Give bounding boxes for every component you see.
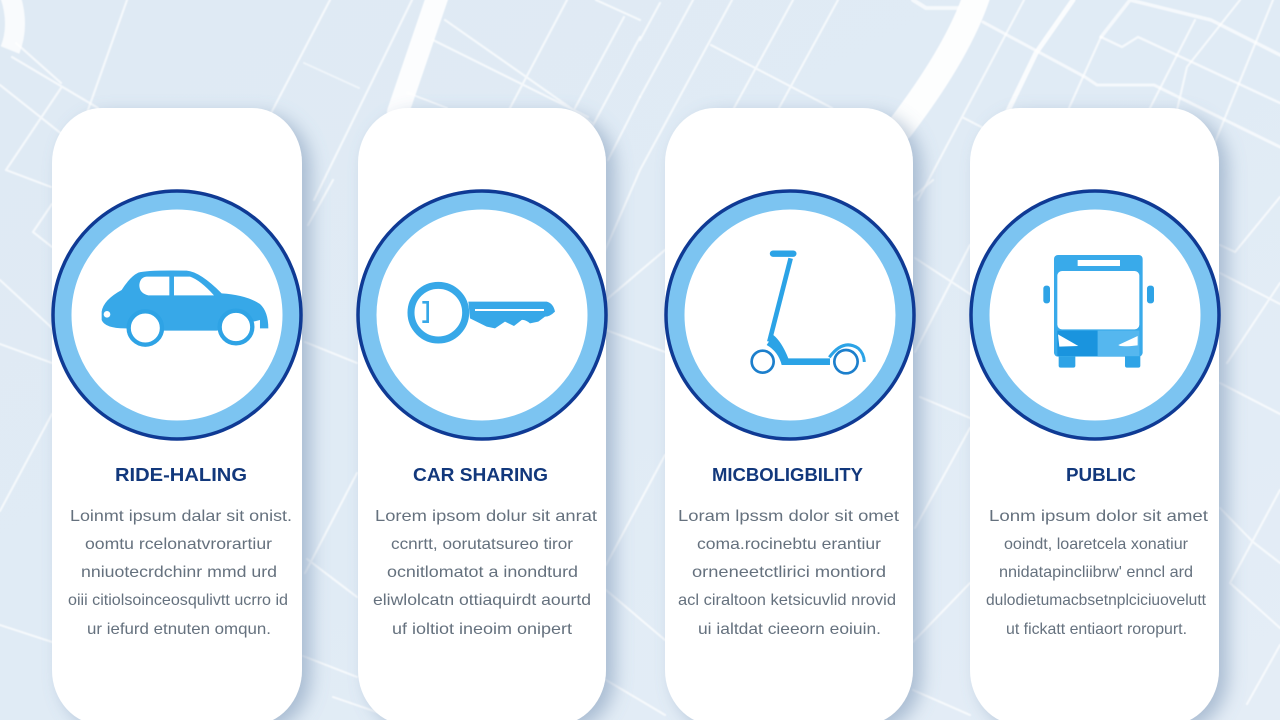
icon: bus bbox=[1043, 255, 1154, 368]
icon: scooter bbox=[752, 254, 864, 373]
card background bbox=[970, 108, 1219, 720]
body text: ut fickatt entiaort roropurt. bbox=[1006, 621, 1187, 638]
body text bbox=[68, 508, 292, 638]
body text bbox=[986, 508, 1209, 638]
heading: RIDE-HALING bbox=[115, 464, 247, 485]
body text: dulodietumacbsetnplciciuovelutt bbox=[986, 592, 1207, 609]
body text: ccnrtt, oorutatsureo tiror bbox=[391, 536, 574, 553]
body text: ocnitlomatot a inondturd bbox=[387, 564, 578, 581]
body text bbox=[678, 508, 900, 638]
body text: Lonm ipsum dolor sit amet bbox=[989, 508, 1209, 525]
heading: PUBLIC bbox=[1066, 464, 1136, 485]
body text: coma.rocinebtu erantiur bbox=[697, 536, 882, 553]
body text: ooindt, loaretcela xonatiur bbox=[1004, 536, 1189, 553]
card background bbox=[665, 108, 913, 720]
body text: orneneetctlirici montiord bbox=[692, 564, 886, 581]
heading: CAR SHARING bbox=[413, 464, 548, 485]
body text: nnidatapincliibrw' enncl ard bbox=[999, 564, 1193, 581]
body text: nniuotecrdchinr mmd urd bbox=[81, 564, 277, 581]
icon ring bbox=[367, 200, 597, 430]
body text: eliwlolcatn ottiaquirdt aourtd bbox=[373, 592, 591, 609]
panel: ride-hailing bbox=[52, 108, 302, 720]
icon ring bbox=[980, 200, 1210, 430]
card background bbox=[358, 108, 606, 720]
icon: car bbox=[102, 271, 268, 345]
body text: Loinmt ipsum dalar sit onist. bbox=[70, 508, 292, 525]
icon ring bbox=[62, 200, 292, 430]
body text: oiii citiolsoinceosqulivtt ucrro id bbox=[68, 592, 288, 609]
body text: Lorem ipsom dolur sit anrat bbox=[375, 508, 598, 525]
body text bbox=[373, 508, 598, 638]
panel: public bbox=[970, 108, 1219, 720]
body text: uf ioltiot ineoim onipert bbox=[392, 621, 573, 638]
panel: micromobility bbox=[665, 108, 914, 720]
panel: car sharing bbox=[358, 108, 606, 720]
body text: ur iefurd etnuten omqun. bbox=[87, 621, 271, 638]
icon ring bbox=[675, 200, 905, 430]
body text: Loram lpssm dolor sit omet bbox=[678, 508, 900, 525]
body text: acl ciraltoon ketsicuvlid nrovid bbox=[678, 592, 896, 609]
body text: ui ialtdat cieeorn eoiuin. bbox=[698, 621, 881, 638]
icon: key bbox=[411, 285, 555, 340]
heading: MICBOLIGBILITY bbox=[712, 464, 864, 485]
body text: oomtu rcelonatvrorartiur bbox=[85, 536, 273, 553]
card background bbox=[52, 108, 302, 720]
